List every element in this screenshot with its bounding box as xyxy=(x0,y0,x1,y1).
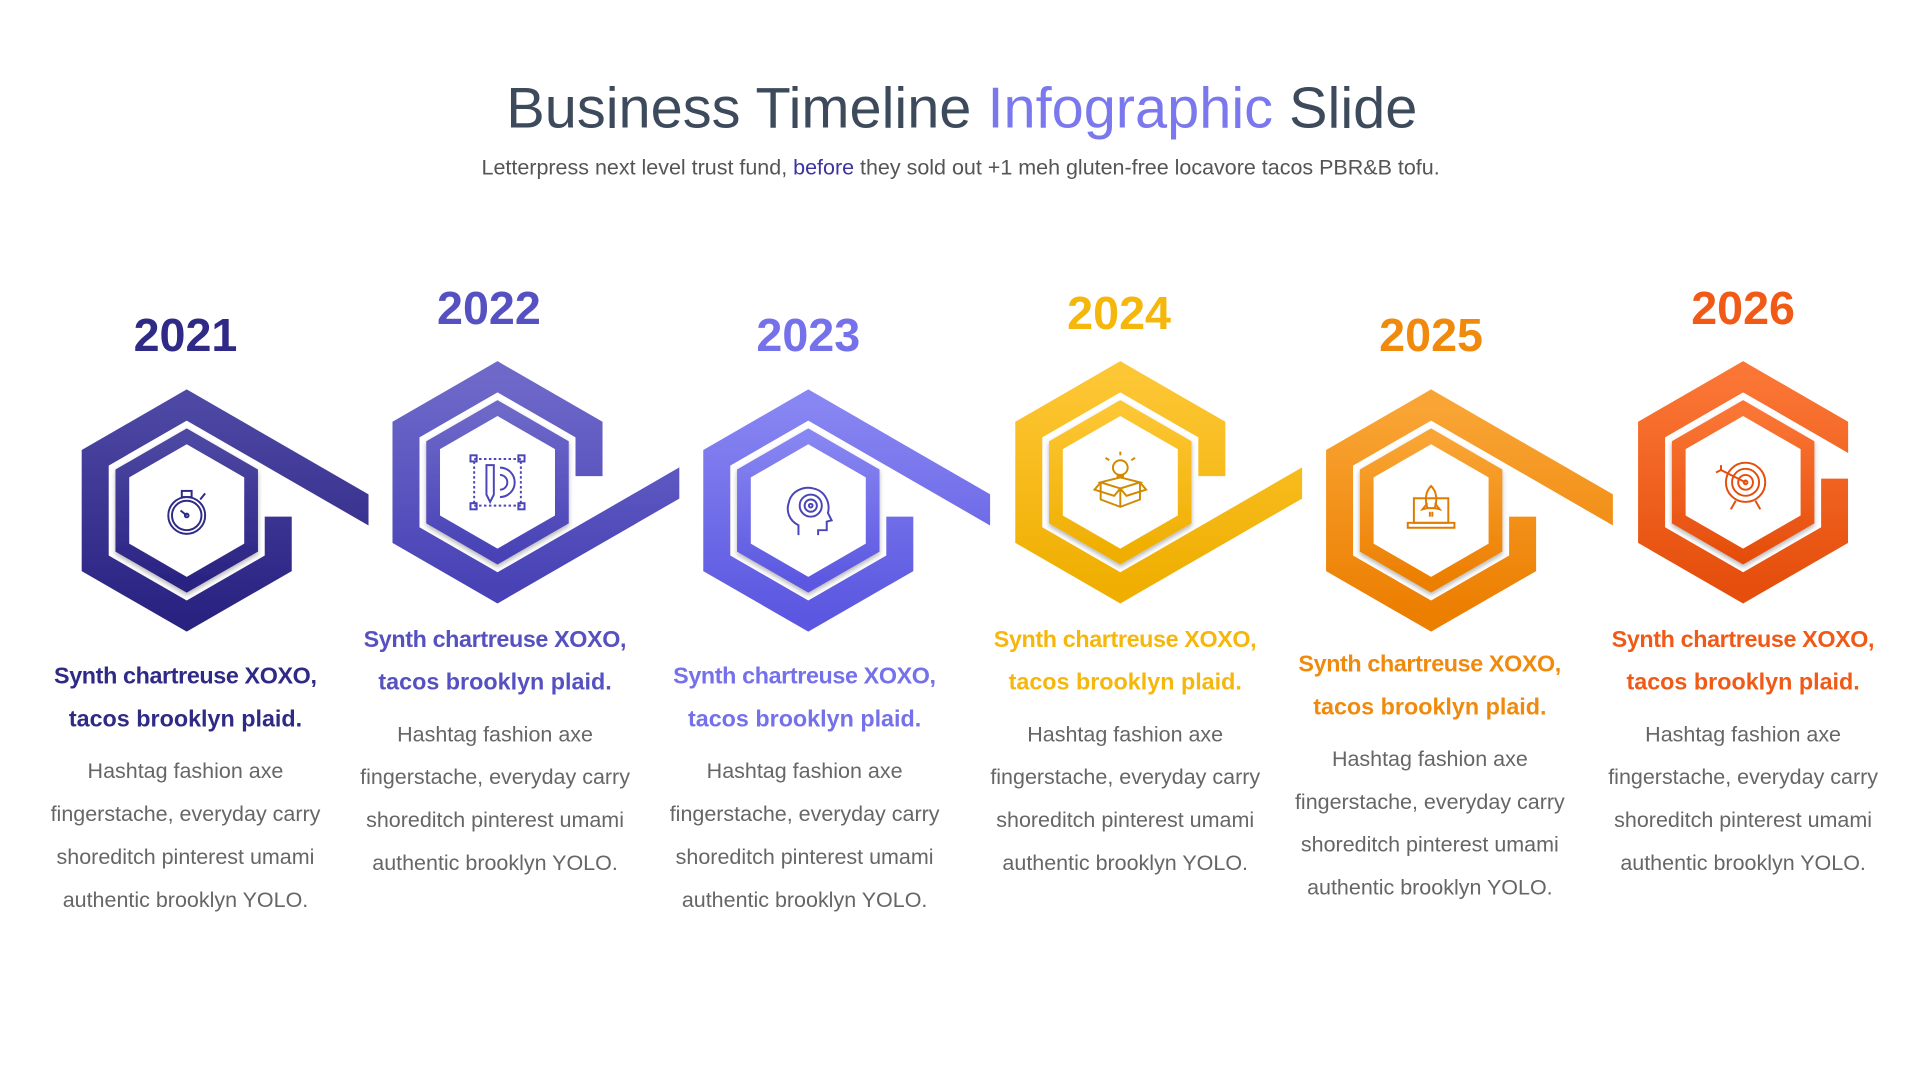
text 2026: Hashtag fashion axe xyxy=(1645,722,1841,746)
step 2024 xyxy=(990,287,1317,875)
text 2022: Hashtag fashion axe xyxy=(397,722,593,746)
year 2026: 2026 xyxy=(1691,282,1795,334)
text 2022: tacos brooklyn plaid. xyxy=(378,669,612,695)
text 2025 xyxy=(1295,650,1565,900)
text 2025: tacos brooklyn plaid. xyxy=(1313,693,1547,719)
text 2026: authentic brooklyn YOLO. xyxy=(1620,851,1866,875)
hexagon 2026 xyxy=(1652,377,1860,588)
text 2021 xyxy=(51,663,321,912)
icon: design pencil gear xyxy=(470,455,525,509)
text 2023 xyxy=(670,663,940,912)
text 2021: Synth chartreuse XOXO, xyxy=(54,663,317,689)
title: Business Timeline Infographic Slide xyxy=(506,77,1417,141)
icon: laptop rocket xyxy=(1408,486,1454,528)
text 2026 xyxy=(1608,626,1878,875)
text 2026: Synth chartreuse XOXO, xyxy=(1612,626,1875,652)
hexagon 2023 xyxy=(717,405,1005,616)
year 2022: 2022 xyxy=(437,282,541,334)
text 2022: Synth chartreuse XOXO, xyxy=(364,626,626,652)
step 2021 xyxy=(51,309,383,912)
text 2021: Hashtag fashion axe xyxy=(88,759,283,783)
text 2021: tacos brooklyn plaid. xyxy=(69,706,302,732)
step 2022 xyxy=(360,282,694,875)
text 2023: tacos brooklyn plaid. xyxy=(688,706,921,732)
text 2021: fingerstache, everyday carry xyxy=(51,802,321,826)
text 2025: shoreditch pinterest umami xyxy=(1301,833,1559,857)
year 2023: 2023 xyxy=(756,309,860,361)
icon: idea box xyxy=(1095,452,1146,507)
text 2023: shoreditch pinterest umami xyxy=(676,845,934,869)
icon: head maze xyxy=(788,488,832,535)
text 2026: shoreditch pinterest umami xyxy=(1614,808,1872,832)
text 2024: Hashtag fashion axe xyxy=(1027,722,1223,746)
year 2021: 2021 xyxy=(134,309,237,361)
text 2021: shoreditch pinterest umami xyxy=(57,845,314,869)
text 2025: Hashtag fashion axe xyxy=(1332,747,1528,771)
hexagon 2024 xyxy=(1029,377,1317,588)
text 2025: authentic brooklyn YOLO. xyxy=(1307,876,1553,900)
text 2023: fingerstache, everyday carry xyxy=(670,802,940,826)
text 2024: fingerstache, everyday carry xyxy=(990,765,1260,789)
year 2024: 2024 xyxy=(1067,287,1171,339)
subtitle: Letterpress next level trust fund, before they sold out +1 meh gluten-free locavore tacos PBR&B tofu. xyxy=(482,155,1440,179)
icon: target xyxy=(1716,463,1765,509)
text 2021: authentic brooklyn YOLO. xyxy=(63,888,308,912)
icon: stopwatch xyxy=(168,491,205,534)
text 2024 xyxy=(990,626,1260,875)
text 2026: tacos brooklyn plaid. xyxy=(1626,669,1860,695)
year 2025: 2025 xyxy=(1379,309,1483,361)
text 2024: Synth chartreuse XOXO, xyxy=(994,626,1257,652)
text 2022 xyxy=(360,626,630,875)
text 2023: Hashtag fashion axe xyxy=(707,759,903,783)
step 2025 xyxy=(1295,309,1628,900)
hexagon 2022 xyxy=(406,377,694,588)
text 2024: shoreditch pinterest umami xyxy=(996,808,1254,832)
text 2025: fingerstache, everyday carry xyxy=(1295,790,1565,814)
text 2024: authentic brooklyn YOLO. xyxy=(1002,851,1248,875)
text 2022: shoreditch pinterest umami xyxy=(366,808,624,832)
text 2026: fingerstache, everyday carry xyxy=(1608,765,1878,789)
step 2026 xyxy=(1608,282,1878,875)
text 2022: authentic brooklyn YOLO. xyxy=(372,851,618,875)
text 2025: Synth chartreuse XOXO, xyxy=(1298,650,1561,676)
hexagon 2021 xyxy=(95,405,383,616)
text 2022: fingerstache, everyday carry xyxy=(360,765,630,789)
text 2023: authentic brooklyn YOLO. xyxy=(682,888,927,912)
step 2023 xyxy=(670,309,1005,912)
hexagon 2025 xyxy=(1340,405,1628,616)
text 2023: Synth chartreuse XOXO, xyxy=(673,663,936,689)
text 2024: tacos brooklyn plaid. xyxy=(1009,669,1242,695)
